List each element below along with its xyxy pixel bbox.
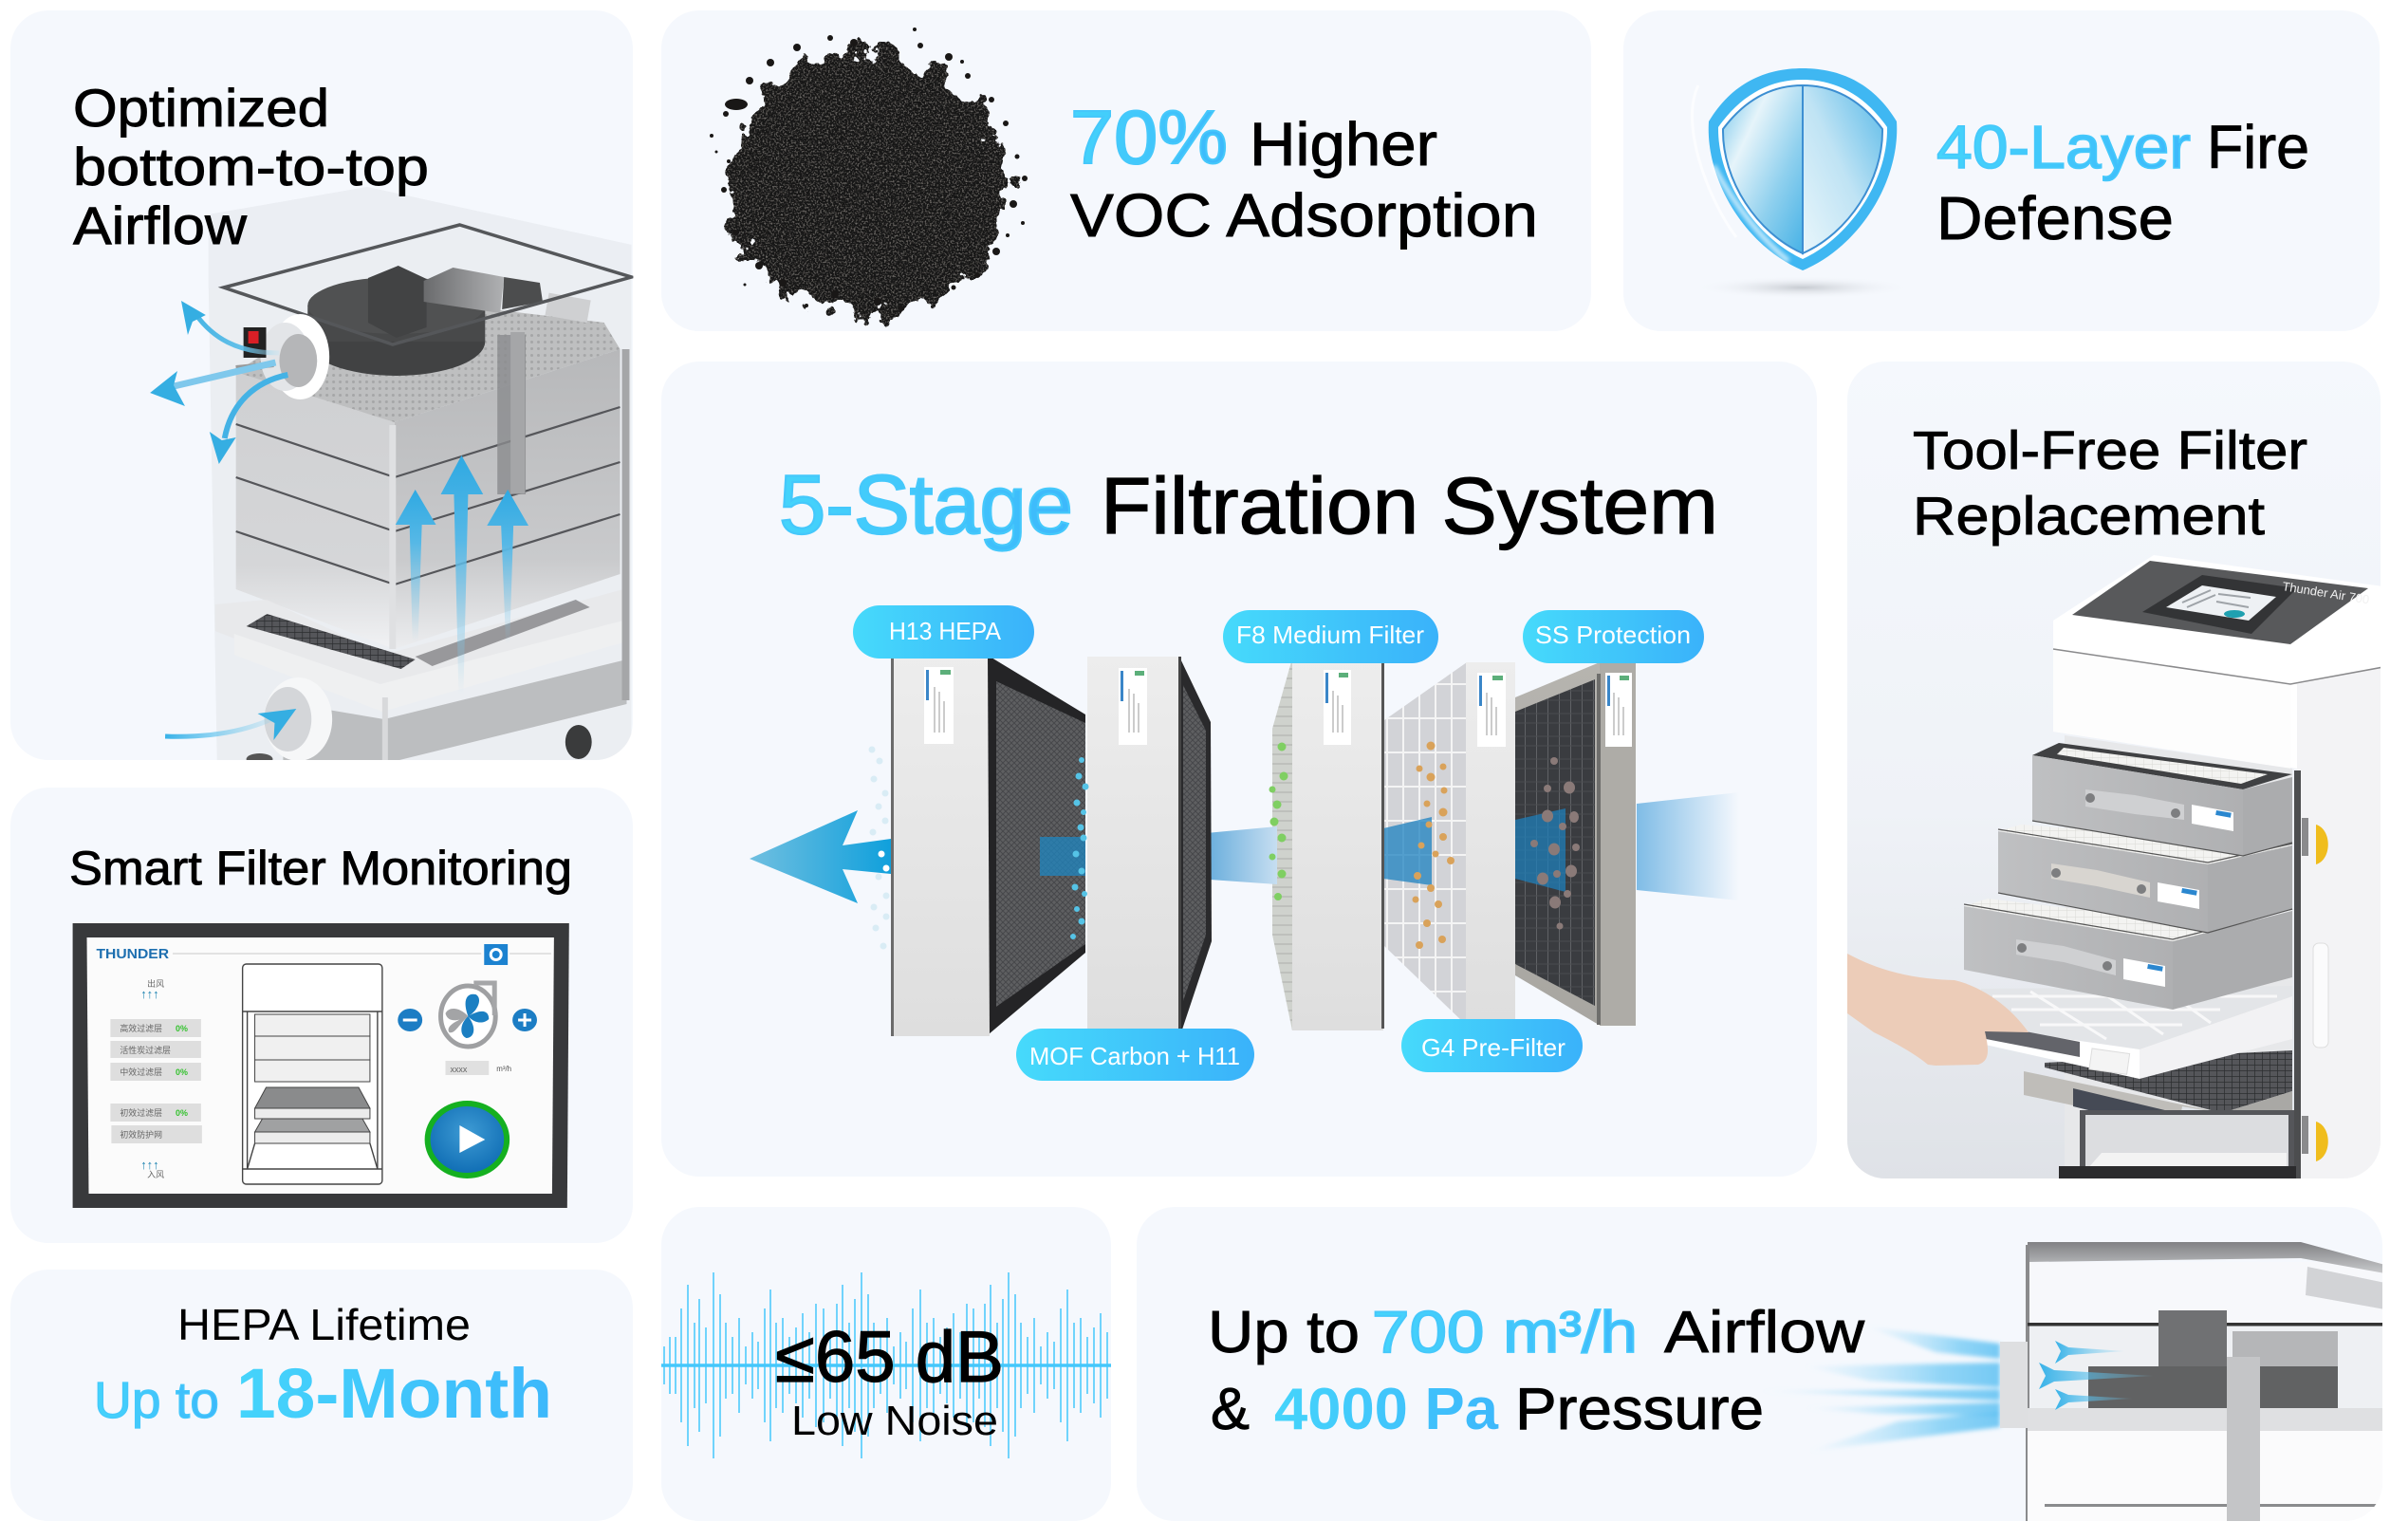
text: 40-layer fire defense: Defense xyxy=(1936,184,2174,252)
particles: orange dots xyxy=(1412,742,1454,949)
text: 40-layer fire defense: Fire xyxy=(2207,113,2309,181)
arrow: inlet airflow xyxy=(165,709,296,740)
icon: blue shield xyxy=(1693,68,1912,299)
panel: voc adsorption xyxy=(661,10,1591,331)
text: 65 dB low noise xyxy=(775,1317,1004,1444)
panel: low noise xyxy=(661,1207,1111,1521)
drawer one xyxy=(2032,743,2292,789)
filter: ss protection xyxy=(1515,662,1636,1026)
filter: h13 hepa xyxy=(891,655,1085,1036)
drawer four white tray xyxy=(1981,986,2292,1049)
filter status list: 0% xyxy=(176,1024,188,1033)
airflow beam: between filters xyxy=(1196,826,1277,884)
yellow hinges xyxy=(2316,825,2328,864)
label: f8 medium filter: F8 Medium Filter xyxy=(1236,621,1424,649)
text: up to 18-month xyxy=(94,1354,552,1433)
heading: tool-free filter replacement: Replacement xyxy=(1913,486,2265,547)
text: 65 dB low noise: Low Noise xyxy=(791,1398,998,1444)
text: 4000 Pa pressure xyxy=(1211,1377,1764,1442)
text: 70% higher voc adsorption xyxy=(1070,95,1538,250)
text: up to 18-month: Up to xyxy=(94,1372,219,1429)
image: activated carbon pile xyxy=(710,28,1028,314)
title: optimized airflow: bottom-to-top xyxy=(73,137,429,196)
text: 70% higher voc adsorption: 70% xyxy=(1070,95,1228,179)
filter status list: 高效过滤层 xyxy=(120,1023,162,1033)
arrow: clean air outflow xyxy=(750,810,891,903)
text: 4000 Pa pressure: & xyxy=(1211,1377,1250,1442)
particles: clean air dots xyxy=(869,746,890,949)
icon: fan with speed buttons: m³/h xyxy=(496,1065,511,1073)
panel: airflow and pressure xyxy=(1137,1207,2385,1530)
machine: transparent cabinet cutaway xyxy=(209,187,631,765)
icon: settings gear xyxy=(484,944,508,965)
label: ss protection xyxy=(1523,610,1704,663)
text: hepa lifetime: HEPA Lifetime xyxy=(177,1300,471,1349)
title: optimized airflow xyxy=(73,78,429,255)
heading: 5-stage filtration system: Filtration System xyxy=(1101,461,1718,550)
panel: smart filter monitoring xyxy=(10,788,633,1243)
text: 4000 Pa pressure: 4000 Pa xyxy=(1274,1377,1499,1442)
text: 40-layer fire defense xyxy=(1936,113,2309,252)
particles: brown dots xyxy=(1530,757,1580,930)
heading: 5-stage filtration system: 5-Stage xyxy=(779,457,1073,551)
filter status list: 初效过滤层 xyxy=(120,1107,162,1118)
filter status list: 活性炭过滤层 xyxy=(120,1045,171,1055)
machine: cabinet with pulled-out drawers xyxy=(1964,555,2383,1178)
panel: hepa lifetime xyxy=(10,1270,633,1521)
filter: f8 medium filter xyxy=(1272,659,1384,1030)
label: h13 hepa: H13 HEPA xyxy=(889,617,1002,645)
airflow beam: incoming air xyxy=(1637,792,1739,900)
heading: 5-stage filtration system xyxy=(779,457,1718,551)
icon: fan with speed buttons xyxy=(398,983,537,1075)
text: 4000 Pa pressure: Pressure xyxy=(1515,1377,1764,1442)
drawer two xyxy=(1998,825,2292,864)
text: up to 700 m3/h airflow: Up to xyxy=(1208,1300,1360,1365)
text: up to 700 m3/h airflow: Airflow xyxy=(1664,1300,1864,1365)
text: 40-layer fire defense: 40-Layer xyxy=(1936,113,2191,181)
chart: sound waveform xyxy=(661,1272,1111,1458)
text: up to 18-month: 18-Month xyxy=(236,1354,552,1433)
panel: tool-free filter replacement xyxy=(1847,362,2383,1178)
arrows: outlet airflow spreading out xyxy=(150,301,287,464)
label: f8 medium filter xyxy=(1223,610,1438,663)
filter status list: ↑↑↑ xyxy=(140,1158,159,1172)
drawer three xyxy=(1968,899,2205,941)
monitor screen xyxy=(73,923,569,1208)
machine: cabinet with pulled-out drawers: Thunder Air 700 xyxy=(2282,579,2370,606)
filter: mof carbon + h11 xyxy=(1087,657,1212,1032)
panel: optimized airflow xyxy=(10,10,633,765)
icon: play button xyxy=(428,1104,507,1176)
heading: tool-free filter replacement xyxy=(1913,420,2307,547)
particles: green dots xyxy=(1269,742,1288,900)
logo: thunder: THUNDER xyxy=(96,946,169,962)
filter status list: 初效防护网 xyxy=(120,1129,162,1140)
label: mof carbon + h11: MOF Carbon + H11 xyxy=(1029,1042,1240,1070)
label: mof carbon + h11 xyxy=(1016,1029,1254,1081)
filter status list: 入风 xyxy=(147,1170,164,1179)
air streaks xyxy=(1806,1329,2002,1448)
heading: smart filter monitoring: Smart Filter Monitoring xyxy=(69,842,572,895)
filter status list: 0% xyxy=(176,1067,188,1077)
arrows: three upward airflow arrows xyxy=(396,455,528,695)
lower drawer xyxy=(2045,1050,2292,1113)
heading: tool-free filter replacement: Tool-Free Filter xyxy=(1913,420,2307,481)
image: hand pulling drawer xyxy=(1847,954,2029,1066)
panel: fire defense xyxy=(1623,10,2380,331)
title: optimized airflow: Optimized xyxy=(73,78,329,138)
text: up to 700 m3/h airflow xyxy=(1208,1300,1864,1365)
title: optimized airflow: Airflow xyxy=(73,195,248,255)
filter: g4 pre-filter xyxy=(1383,662,1515,1026)
panel: 5-stage filtration xyxy=(661,362,1817,1177)
label: h13 hepa xyxy=(853,605,1034,659)
filter status list xyxy=(110,978,202,1179)
machine line drawing xyxy=(243,964,382,1184)
arrows: blue air intake arrows xyxy=(2039,1341,2154,1410)
text: 70% higher voc adsorption: Higher xyxy=(1250,110,1437,178)
filter status list: 0% xyxy=(176,1108,188,1118)
label: g4 pre-filter xyxy=(1401,1019,1583,1072)
machine: side cutaway with air intake xyxy=(1806,1242,2382,1521)
filter status list: 出风 xyxy=(147,978,164,989)
icon: fan with speed buttons: xxxx xyxy=(450,1065,468,1074)
filter status list: ↑↑↑ xyxy=(140,987,159,1001)
particles: blue dots xyxy=(1070,757,1089,939)
text: up to 700 m3/h airflow: 700 m³/h xyxy=(1372,1300,1638,1365)
label: g4 pre-filter: G4 Pre-Filter xyxy=(1421,1033,1566,1062)
text: 70% higher voc adsorption: VOC Adsorption xyxy=(1070,181,1538,250)
filter status list: 中效过滤层 xyxy=(120,1067,162,1077)
label: ss protection: SS Protection xyxy=(1535,621,1691,649)
text: 65 dB low noise: ≤65 dB xyxy=(775,1317,1004,1398)
